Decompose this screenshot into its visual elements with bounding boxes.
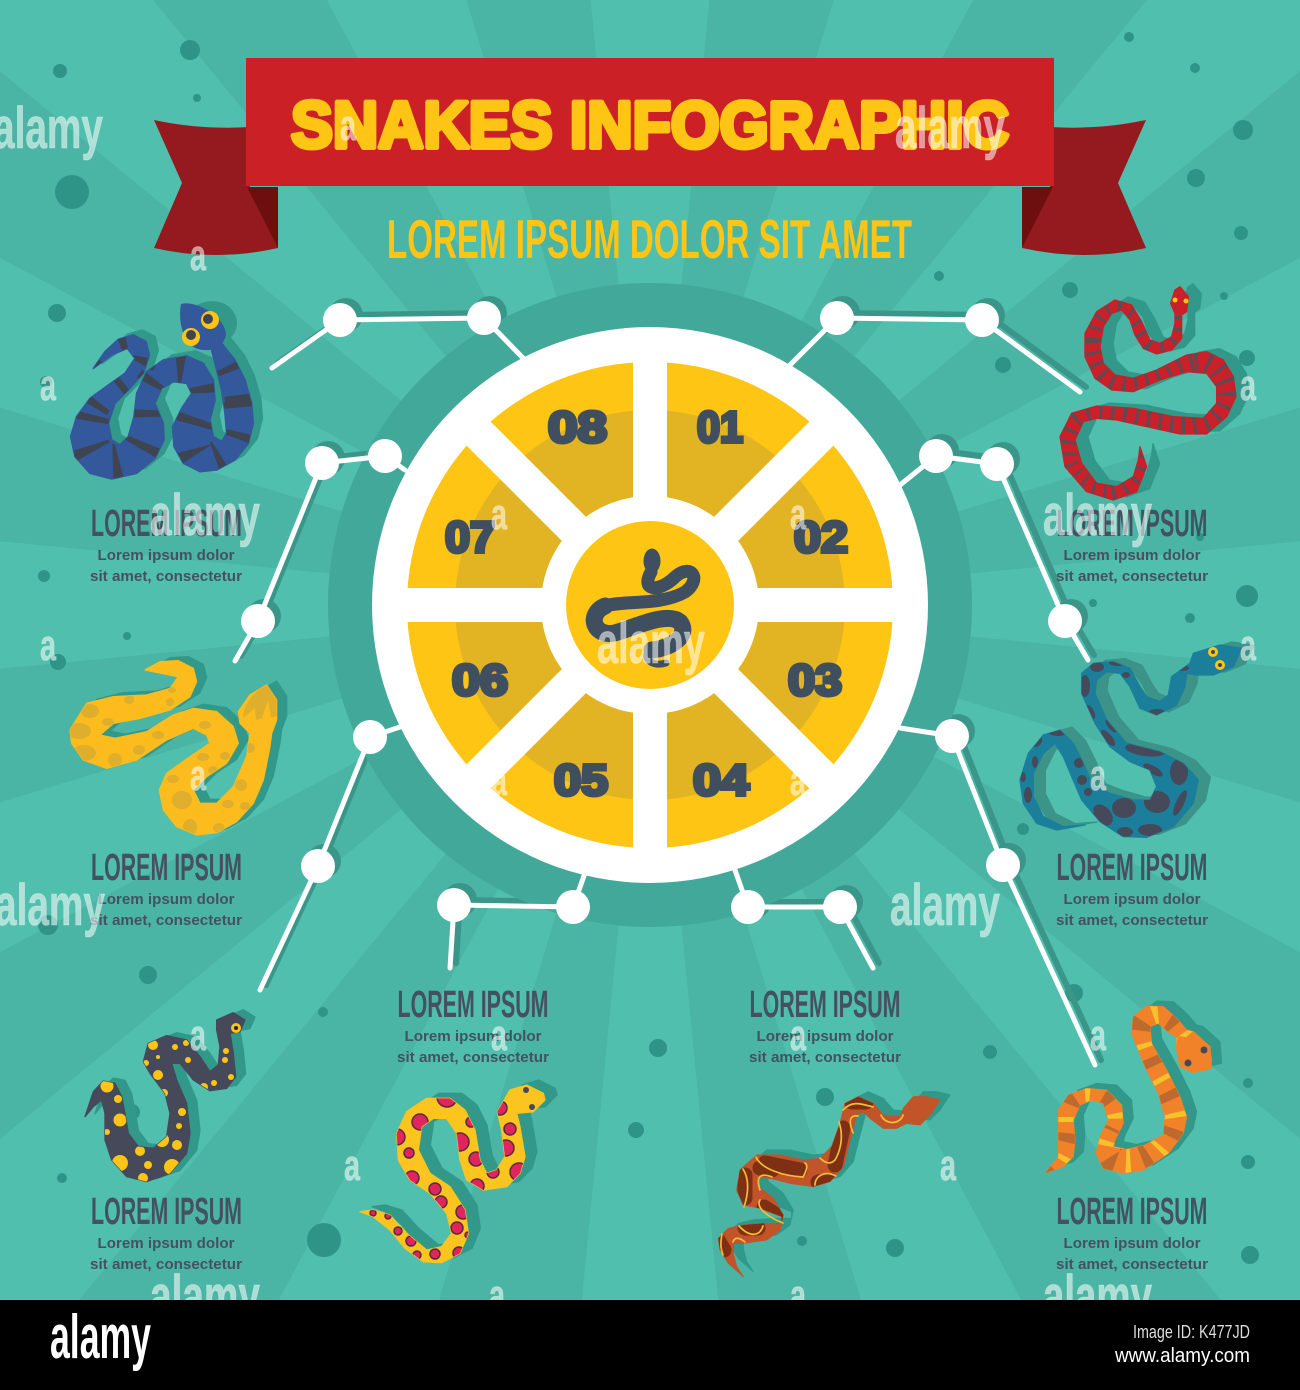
stock-photo watermarks: a (491, 756, 507, 805)
stock-photo watermarks: a (790, 490, 806, 539)
stock-photo watermarks: a (344, 1141, 360, 1190)
segment numbers: 04 (693, 756, 750, 805)
stock-photo watermarks: alamy (1043, 483, 1152, 548)
stock-photo watermarks: alamy (597, 611, 705, 676)
label: top left: sit amet, consectetur (90, 568, 242, 585)
label: middle right: Lorem ipsum dolor (1064, 891, 1201, 908)
stock-photo watermarks: a (489, 1271, 505, 1320)
stock-photo watermarks: a (40, 621, 56, 670)
stock-photo watermarks: a (190, 751, 206, 800)
label: bottom centre-left: sit amet, consectetur (397, 1049, 549, 1066)
snake: dark with yellow dots, bottom left (85, 1010, 255, 1183)
label: bottom centre-left (397, 984, 549, 1066)
snake: blue banded, top left (71, 301, 262, 479)
snake: orange banded, bottom right (1045, 1001, 1222, 1173)
stock-photo watermarks: a (790, 756, 806, 805)
label: bottom centre-right: sit amet, consectetur (749, 1049, 901, 1066)
snake: teal blotched, right (1020, 642, 1254, 837)
stock-photo watermarks: a (491, 1011, 507, 1060)
segment numbers: 08 (548, 403, 607, 452)
icon: centre snake (594, 548, 694, 664)
footer bar: alamy (50, 1303, 151, 1372)
label: top right: sit amet, consectetur (1056, 568, 1208, 585)
label: bottom centre-left: Lorem ipsum dolor (404, 1028, 542, 1045)
label: middle left: LOREM IPSUM (91, 847, 242, 889)
segment numbers: 05 (554, 756, 608, 805)
subtitle: LOREM IPSUM DOLOR SIT AMET (387, 208, 912, 270)
stock-photo watermarks: alamy (150, 483, 260, 548)
segment numbers: 03 (788, 656, 842, 705)
segment numbers: 07 (445, 513, 495, 562)
stock-photo watermarks: a (340, 101, 356, 150)
footer bar (0, 1300, 1300, 1390)
stock-photo watermarks: alamy (890, 873, 1000, 938)
segment numbers (445, 403, 848, 805)
stock-photo watermarks: a (190, 231, 206, 280)
label: middle left: Lorem ipsum dolor (98, 891, 235, 908)
stock-photo watermarks: alamy (895, 96, 1005, 161)
label: bottom left: Lorem ipsum dolor (98, 1235, 235, 1252)
label: top left: Lorem ipsum dolor (98, 547, 235, 564)
stock-photo watermarks: a (790, 1011, 806, 1060)
label: bottom right: sit amet, consectetur (1056, 1256, 1208, 1273)
segment numbers: 02 (794, 513, 848, 562)
snake: yellow spotted, left (67, 657, 287, 835)
stock-photo watermarks: a (1240, 621, 1256, 670)
label: top right: Lorem ipsum dolor (1064, 547, 1201, 564)
snake: yellow with red spots, bottom centre-left (360, 1080, 557, 1263)
label: bottom right (1056, 1191, 1208, 1273)
label: bottom left (90, 1191, 242, 1273)
snake: red banded, top right (1060, 284, 1249, 500)
stock-photo watermarks: a (190, 1011, 206, 1060)
label: top left (90, 503, 242, 585)
snake: brown with yellow lines, bottom centre-right (718, 1092, 950, 1277)
connector lines and nodes (241, 296, 1101, 1060)
label: middle right: sit amet, consectetur (1056, 912, 1208, 929)
ribbon banner (154, 58, 1146, 255)
label: middle right (1056, 847, 1208, 929)
wheel outer ring (328, 283, 972, 927)
segment numbers: 01 (697, 403, 743, 452)
segment numbers: 06 (452, 656, 508, 705)
stock-photo watermarks: a (1240, 361, 1256, 410)
label: bottom centre-right (749, 984, 901, 1066)
label: top right (1056, 503, 1208, 585)
stock-photo watermarks: a (1090, 751, 1106, 800)
label: middle left (90, 847, 242, 929)
label: bottom left: sit amet, consectetur (90, 1256, 242, 1273)
label: bottom centre-left: LOREM IPSUM (398, 984, 548, 1026)
central wheel (372, 327, 928, 883)
footer bar: Image ID: K477JD (1133, 1322, 1250, 1342)
stock-photo watermarks: alamy (150, 1264, 260, 1329)
label: bottom right: Lorem ipsum dolor (1064, 1235, 1201, 1252)
stock-photo watermarks: a (491, 490, 507, 539)
label: top left: LOREM IPSUM (91, 503, 242, 545)
stock-photo watermarks: a (790, 1271, 806, 1320)
label: bottom left: LOREM IPSUM (91, 1191, 242, 1233)
label: bottom centre-right: LOREM IPSUM (750, 984, 900, 1026)
stock-photo watermarks: a (40, 361, 56, 410)
title: SNAKES INFOGRAPHIC (291, 88, 1009, 162)
stock-photo watermarks: a (1090, 1011, 1106, 1060)
label: bottom centre-right: Lorem ipsum dolor (756, 1028, 894, 1045)
stock-photo watermarks: alamy (1043, 1264, 1152, 1329)
label: middle left: sit amet, consectetur (90, 912, 242, 929)
stock-photo watermarks: a (940, 1141, 956, 1190)
footer bar: www.alamy.com (1114, 1345, 1250, 1367)
